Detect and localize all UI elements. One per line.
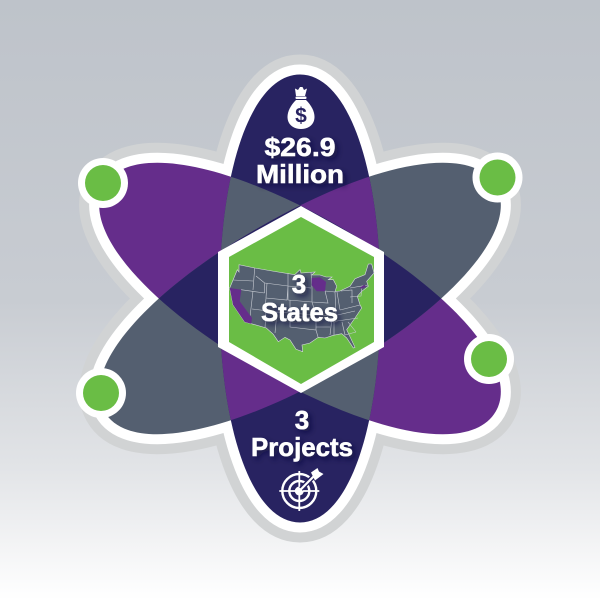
text: 3 Projects: 3 — [295, 405, 309, 435]
electron: top right — [472, 152, 522, 202]
orbit: navy — [220, 74, 380, 522]
text: 3 States: States — [261, 297, 338, 327]
text: 3 Projects — [251, 405, 353, 462]
electron: bottom right — [464, 334, 514, 384]
orbit: slate — [63, 114, 537, 483]
icon: target with arrow — [279, 468, 324, 511]
highlighted state: California — [230, 288, 252, 324]
atom white outline — [63, 74, 537, 522]
icon: money bag — [288, 87, 314, 129]
text: 3 States — [261, 269, 338, 327]
icon: money bag: $ — [295, 104, 307, 128]
text: 3 Projects: Projects — [251, 432, 353, 462]
highlighted state: Connecticut — [360, 285, 366, 289]
map of the United States — [230, 264, 374, 352]
text: $26.9 Million: Million — [256, 159, 344, 189]
orbit: purple — [63, 114, 537, 483]
overlap: navy and purple orbits — [221, 176, 379, 420]
text: $26.9 Million — [256, 132, 344, 189]
highlighted state: Wisconsin — [312, 277, 326, 291]
central hexagon — [218, 206, 384, 393]
atom halo — [63, 74, 537, 522]
overlap: purple and slate orbits — [159, 206, 441, 344]
text: 3 States: 3 — [292, 269, 306, 299]
overlap: navy and slate orbits — [221, 176, 379, 420]
state borders — [233, 268, 368, 337]
electron: top left — [78, 158, 128, 208]
text: $26.9 Million: $26.9 — [264, 132, 336, 162]
electron: bottom left — [76, 368, 126, 418]
